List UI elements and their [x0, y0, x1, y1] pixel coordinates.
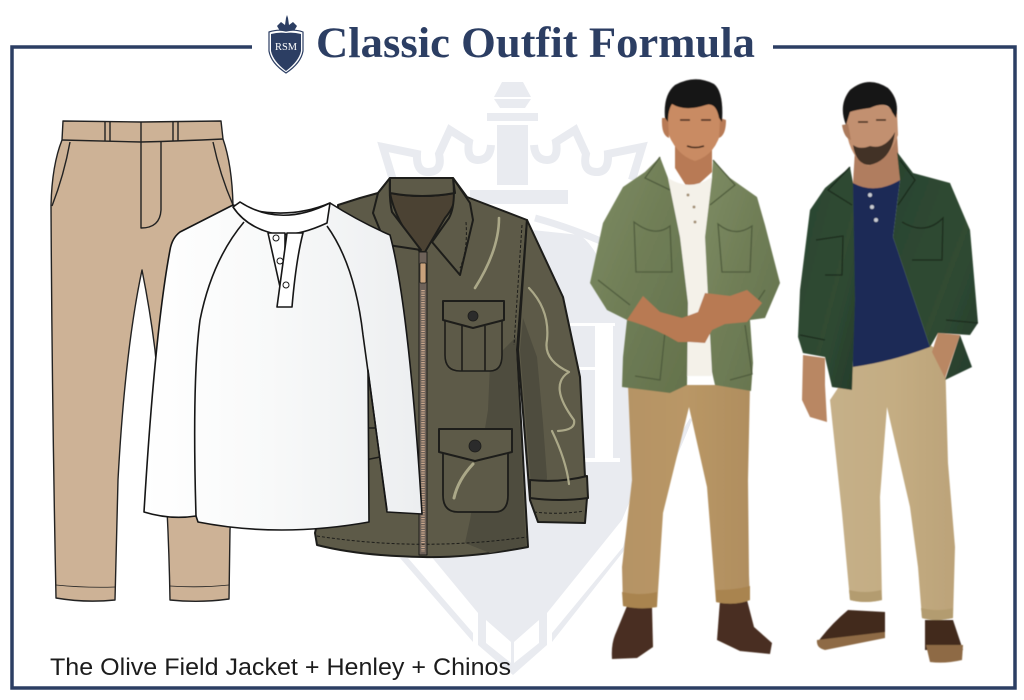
- man 2: navy henley: [853, 180, 930, 367]
- man 1: chinos: [622, 385, 750, 608]
- man 1: jacket right side: [705, 160, 780, 391]
- header: [269, 15, 755, 73]
- jacket: body shading: [465, 337, 526, 553]
- jacket: collar: [373, 178, 473, 275]
- henley: placket: [268, 233, 285, 287]
- henley: collar: [233, 202, 330, 235]
- watermark: sword: [470, 82, 568, 204]
- logo: crest icon: [269, 15, 303, 73]
- chinos: waistband and fly: [52, 122, 233, 587]
- man 2: jacket left side: [798, 167, 855, 390]
- man 2: ear: [842, 124, 851, 140]
- jacket: chest pocket: [443, 301, 504, 371]
- man 1: facial features: [680, 120, 711, 148]
- man 2: shoe cuffs: [849, 590, 953, 620]
- photo: man in dark green jacket: [798, 82, 978, 663]
- man 2: neck: [853, 135, 900, 200]
- man 1: hair: [665, 79, 722, 122]
- man 1: hands: [627, 290, 762, 343]
- jacket: lower pocket: [439, 429, 512, 512]
- watermark: shield band: [410, 218, 612, 246]
- flat illustration: chinos: [51, 121, 240, 601]
- man 1: white henley: [668, 177, 712, 376]
- man 1: ears: [662, 118, 726, 138]
- man 1: chino cuffs: [622, 586, 750, 608]
- jacket: highlights: [454, 218, 574, 498]
- man 2: hair: [843, 82, 897, 125]
- jacket: zipper: [419, 252, 427, 555]
- man 2: hand: [802, 355, 827, 422]
- man 2: beard: [853, 132, 895, 165]
- henley: sleeve seams: [195, 222, 387, 516]
- man 2: chinos: [830, 345, 955, 620]
- watermark: shield outer edge: [400, 418, 692, 642]
- photo: man in olive jacket: [590, 79, 780, 659]
- jacket: sleeve shading: [520, 318, 547, 498]
- logo: crest icon: RSM: [275, 41, 297, 53]
- man 1: boots: [612, 600, 772, 659]
- man 1: neck and face: [675, 130, 712, 192]
- jacket: left pocket fragment: [365, 428, 380, 460]
- man 2: pockets and seams: [800, 160, 978, 340]
- watermark: crown: [383, 130, 642, 180]
- henley: buttons: [273, 235, 289, 288]
- man 1: jacket left side: [590, 157, 688, 393]
- title: Classic Outfit Formula: [316, 20, 755, 67]
- henley: garment silhouette: [144, 203, 422, 530]
- jacket: stitching: [317, 222, 584, 544]
- watermark: shield interior: [340, 228, 672, 675]
- jacket: body: [315, 178, 528, 557]
- caption: The Olive Field Jacket + Henley + Chinos: [50, 654, 511, 681]
- flat illustration: olive field jacket: [315, 178, 588, 557]
- man 2: forearm in pocket: [932, 333, 960, 378]
- flat illustration: white henley: [144, 202, 422, 530]
- jacket: sleeve: [518, 220, 587, 523]
- man 2: eyes: [858, 120, 886, 122]
- watermark: brand crest: [340, 82, 692, 675]
- man 1: pocket and placket details: [598, 157, 765, 380]
- watermark: monogram letters: [568, 323, 620, 462]
- jacket: sleeve cuff: [530, 476, 588, 500]
- man 2: shoes: [817, 610, 963, 663]
- jacket: inner neck: [390, 193, 455, 252]
- man 2: jacket right side: [893, 152, 978, 380]
- man 2: face: [846, 102, 898, 166]
